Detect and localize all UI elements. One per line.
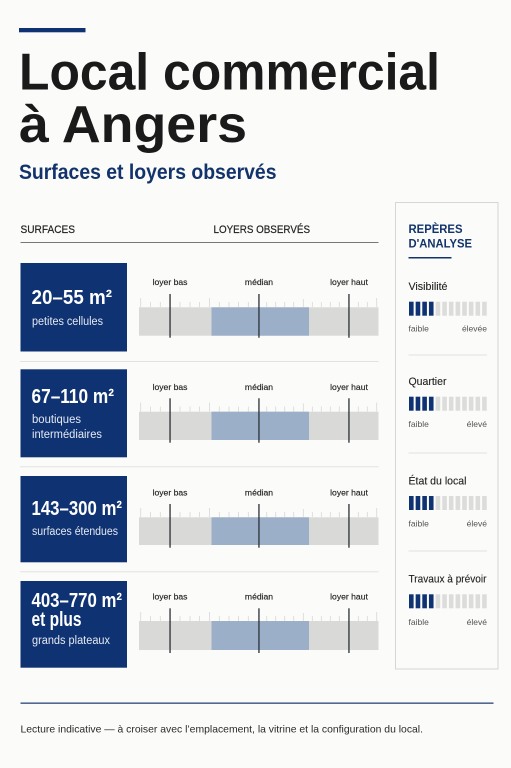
row: 20–55 m²	[20, 263, 378, 352]
rent scale: médian	[245, 488, 273, 498]
table header	[20, 223, 378, 243]
rent scale	[139, 488, 378, 548]
rent scale: loyer bas	[153, 591, 187, 601]
gauge: état du local	[408, 474, 487, 529]
gauge: visibilité: Visibilité	[408, 281, 448, 293]
rent scale	[139, 277, 378, 338]
rent scale: loyer haut	[330, 488, 368, 498]
accent bar	[19, 28, 86, 32]
title	[19, 44, 440, 154]
row: 403–770 m² et plus	[20, 581, 378, 668]
gauge: quartier: élevé	[467, 419, 487, 429]
rent scale: loyer haut	[330, 591, 368, 601]
gauge: état du local: État du local	[408, 474, 466, 487]
surface card	[20, 476, 127, 562]
row: 67–110 m²	[20, 369, 378, 457]
surface card: boutiques	[32, 414, 81, 426]
rent scale: loyer bas	[153, 277, 187, 287]
gauge: visibilité: faible	[408, 324, 429, 334]
title: à Angers	[19, 96, 247, 154]
rent scale: loyer haut	[330, 277, 368, 287]
gauge: état du local: élevé	[467, 519, 487, 529]
rent scale: médian	[245, 277, 273, 287]
gauge: travaux à prévoir: faible	[408, 617, 429, 627]
rent scale: médian	[245, 591, 273, 601]
panel: repères d'analyse	[396, 202, 498, 669]
gauge: visibilité	[408, 281, 487, 334]
surface card: et plus	[32, 609, 82, 631]
gauge: travaux à prévoir: Travaux à prévoir	[408, 574, 487, 586]
footer note: Lecture indicative — à croiser avec l’emplacement, la vitrine et la configuration du local.	[20, 724, 423, 736]
surface card: 403–770 m²	[32, 590, 122, 612]
surface card: grands plateaux	[32, 635, 110, 647]
gauge: état du local: faible	[408, 519, 429, 529]
surface card: 143–300 m²	[32, 498, 122, 520]
subtitle: Surfaces et loyers observés	[19, 161, 276, 184]
gauge: travaux à prévoir: élevé	[467, 617, 487, 627]
gauge: quartier: Quartier	[408, 376, 447, 388]
gauge: quartier	[408, 376, 487, 429]
gauge: travaux à prévoir	[408, 574, 487, 627]
table header: SURFACES	[20, 224, 75, 236]
title: Local commercial	[19, 44, 440, 102]
surface card: surfaces étendues	[32, 526, 118, 538]
surface card: petites cellules	[32, 316, 103, 328]
panel heading: D'ANALYSE	[408, 236, 472, 250]
surface card: 67–110 m²	[32, 386, 114, 408]
surface card: intermédiaires	[32, 429, 102, 441]
row: 143–300 m²	[20, 476, 378, 562]
rent scale: loyer bas	[153, 488, 187, 498]
rent scale	[139, 382, 378, 443]
rent scale: loyer bas	[153, 382, 187, 392]
rent scale: loyer haut	[330, 382, 368, 392]
gauge: visibilité: élevée	[462, 324, 487, 334]
table header: LOYERS OBSERVÉS	[214, 223, 310, 236]
surface card	[20, 581, 127, 668]
surface card: 20–55 m²	[32, 287, 112, 309]
rent scale: médian	[245, 382, 273, 392]
surface card	[20, 263, 127, 352]
panel heading	[408, 221, 472, 258]
gauge: quartier: faible	[408, 419, 429, 429]
panel heading: REPÈRES	[408, 221, 462, 236]
surface card	[20, 369, 127, 457]
rent scale	[139, 591, 378, 653]
